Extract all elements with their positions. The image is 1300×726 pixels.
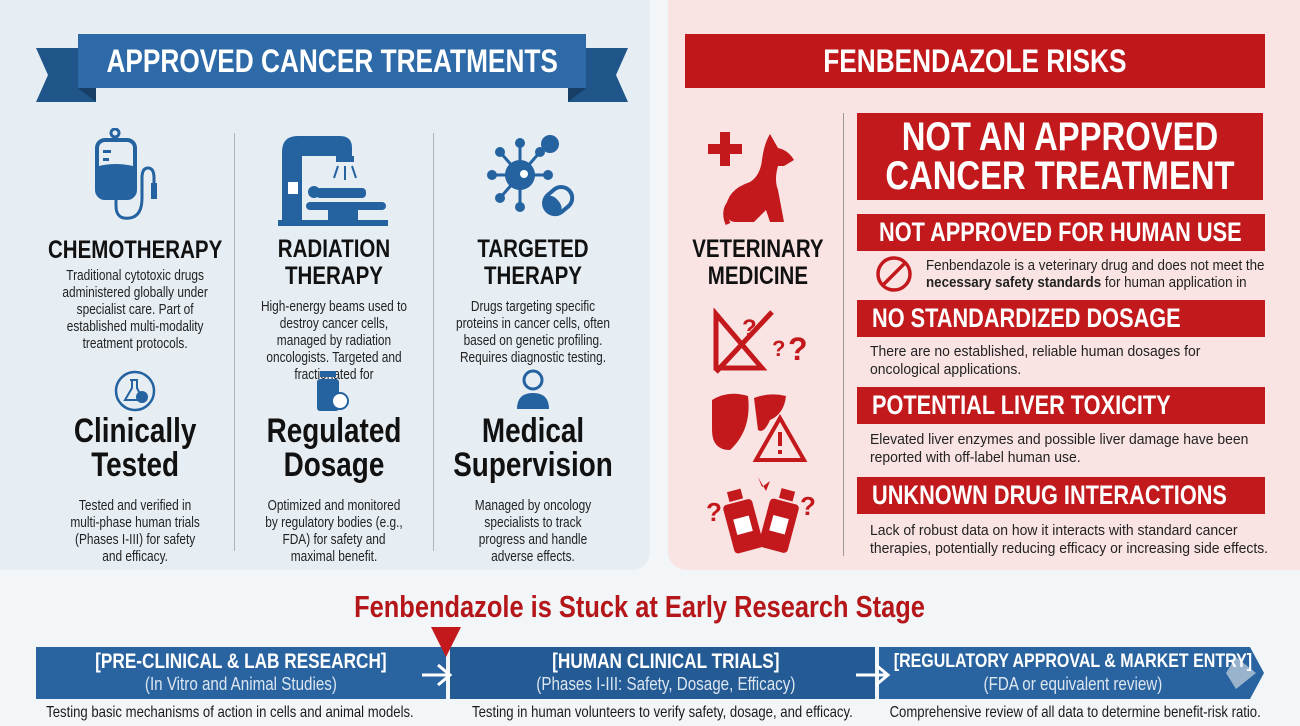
feature: medical supervision: Supervision <box>453 446 613 484</box>
heading: unknown drug interactions: UNKNOWN DRUG INTERACTIONS <box>872 480 1227 510</box>
column 1: chemotherapy <box>48 236 222 352</box>
icon: doctor <box>517 370 549 409</box>
panel: fenbendazole risks <box>668 0 1300 570</box>
box: not an approved cancer treatment: NOT AN APPROVED <box>902 115 1218 159</box>
text: dosage <box>870 343 1200 378</box>
icon: ruler questions: ? <box>788 331 808 367</box>
column 2: radiation therapy <box>261 235 407 383</box>
banner: approved cancer treatments <box>36 34 628 102</box>
column 3: targeted therapy: TARGETED <box>477 235 589 263</box>
feature: regulated dosage: Dosage <box>284 446 384 484</box>
heading: potential liver toxicity: POTENTIAL LIVER TOXICITY <box>872 390 1171 420</box>
icon: medicine bottle clock <box>317 371 349 411</box>
text: human use: Fenbendazole is a veterinary drug and does not meet the <box>926 257 1264 274</box>
text: liver: Elevated liver enzymes and possible liver damage have been <box>870 431 1248 448</box>
caption: stage 3: Comprehensive review of all data to determine benefit-risk ratio. <box>890 704 1261 721</box>
heading: no standardized dosage: NO STANDARDIZED DOSAGE <box>872 303 1181 333</box>
feature: clinically tested: Clinically <box>74 412 196 450</box>
heading: not approved for human use: NOT APPROVED FOR HUMAN USE <box>879 217 1242 247</box>
title: stuck at early research stage: Fenbendazole is Stuck at Early Research Stage <box>354 589 925 624</box>
icon: drug bottles interaction: ? <box>800 491 816 521</box>
feature: clinically tested: Tested and verified in multi-phase human trials (Phases I-III) for safety and efficacy. <box>70 498 200 565</box>
stage 3: (FDA or equivalent review) <box>984 673 1162 694</box>
text: dosage: There are no established, reliable human dosages for <box>870 343 1200 360</box>
banner: fenbendazole risks <box>685 34 1265 88</box>
label: veterinary medicine: MEDICINE <box>708 262 808 290</box>
column 3: targeted therapy: Drugs targeting specific proteins in cancer cells, often based on genetic profiling. Requires diagnostic testing. <box>456 299 610 366</box>
banner: fenbendazole risks: FENBENDAZOLE RISKS <box>823 43 1126 79</box>
stage 2 <box>536 650 795 694</box>
caption: stage 1: Testing basic mechanisms of action in cells and animal models. <box>46 704 414 721</box>
feature: medical supervision: Medical <box>482 412 584 450</box>
icon: drug bottles interaction <box>706 477 816 554</box>
icon: IV bag <box>95 128 157 220</box>
feature: regulated dosage: Regulated <box>267 412 401 450</box>
text: interactions: therapies, potentially reducing efficacy or increasing side effects. <box>870 540 1268 557</box>
timeline bar <box>36 647 1264 699</box>
stage 1: [PRE-CLINICAL & LAB RESEARCH] <box>95 650 387 673</box>
text: human use <box>926 257 1264 291</box>
stage 1 <box>95 650 387 694</box>
stage 1: (In Vitro and Animal Studies) <box>145 673 337 694</box>
icon: ruler questions <box>714 308 808 374</box>
stage 3 <box>894 650 1252 694</box>
text: interactions: Lack of robust data on how it interacts with standard cancer <box>870 522 1238 539</box>
column 3: targeted therapy <box>456 235 610 366</box>
label: veterinary medicine <box>692 235 824 290</box>
feature: medical supervision: Managed by oncology specialists to track progress and handle adverse effects. <box>475 498 591 565</box>
icon: veterinary dog <box>708 132 794 225</box>
heading: no standardized dosage <box>857 300 1265 337</box>
icon: drug bottles interaction: ? <box>706 497 722 527</box>
feature: regulated dosage <box>265 412 403 565</box>
column 1: chemotherapy: Traditional cytotoxic drugs administered globally under specialist care. Part of established multi-modality treatment protocols. <box>62 268 208 352</box>
text: interactions <box>870 522 1268 557</box>
box: not an approved cancer treatment: CANCER TREATMENT <box>885 154 1235 198</box>
marker: current stage <box>431 627 461 657</box>
icon: ruler questions: ? <box>742 315 757 342</box>
icon: liver warning <box>712 394 808 462</box>
box: not an approved cancer treatment <box>857 113 1263 200</box>
panel: approved treatments <box>0 0 650 570</box>
icon: radiation machine <box>278 136 388 226</box>
stage 3: [REGULATORY APPROVAL & MARKET ENTRY] <box>894 650 1252 672</box>
column 2: radiation therapy: THERAPY <box>285 262 383 290</box>
feature: regulated dosage: Optimized and monitored by regulatory bodies (e.g., FDA) for safety and maximal benefit. <box>265 498 403 565</box>
caption: stage 2: Testing in human volunteers to verify safety, dosage, and efficacy. <box>472 704 853 721</box>
feature: clinically tested: Tested <box>91 446 179 484</box>
icon: targeted molecule and pill <box>487 135 574 216</box>
column 2: radiation therapy: RADIATION <box>278 235 390 263</box>
text: human use: necessary safety standards for human application in <box>926 274 1247 291</box>
banner: approved cancer treatments: APPROVED CANCER TREATMENTS <box>106 43 558 79</box>
column 3: targeted therapy: THERAPY <box>484 262 582 290</box>
icon: flask check <box>114 370 156 412</box>
column 1: chemotherapy: CHEMOTHERAPY <box>48 236 222 264</box>
icon: ruler questions: ? <box>772 336 785 361</box>
heading: potential liver toxicity <box>857 387 1265 424</box>
text: liver: reported with off-label human use. <box>870 449 1081 466</box>
stage 2: (Phases I-III: Safety, Dosage, Efficacy) <box>536 673 795 694</box>
label: veterinary medicine: VETERINARY <box>692 235 824 263</box>
feature: clinically tested <box>70 412 200 565</box>
feature: medical supervision <box>453 412 613 565</box>
text: dosage: oncological applications. <box>870 361 1021 378</box>
text: liver <box>870 431 1248 466</box>
column 2: radiation therapy: High-energy beams used to destroy cancer cells, managed by radiation oncologists. Targeted and fractionated for <box>261 299 407 383</box>
stage 2: [HUMAN CLINICAL TRIALS] <box>552 650 780 673</box>
icon: prohibited <box>876 256 912 292</box>
